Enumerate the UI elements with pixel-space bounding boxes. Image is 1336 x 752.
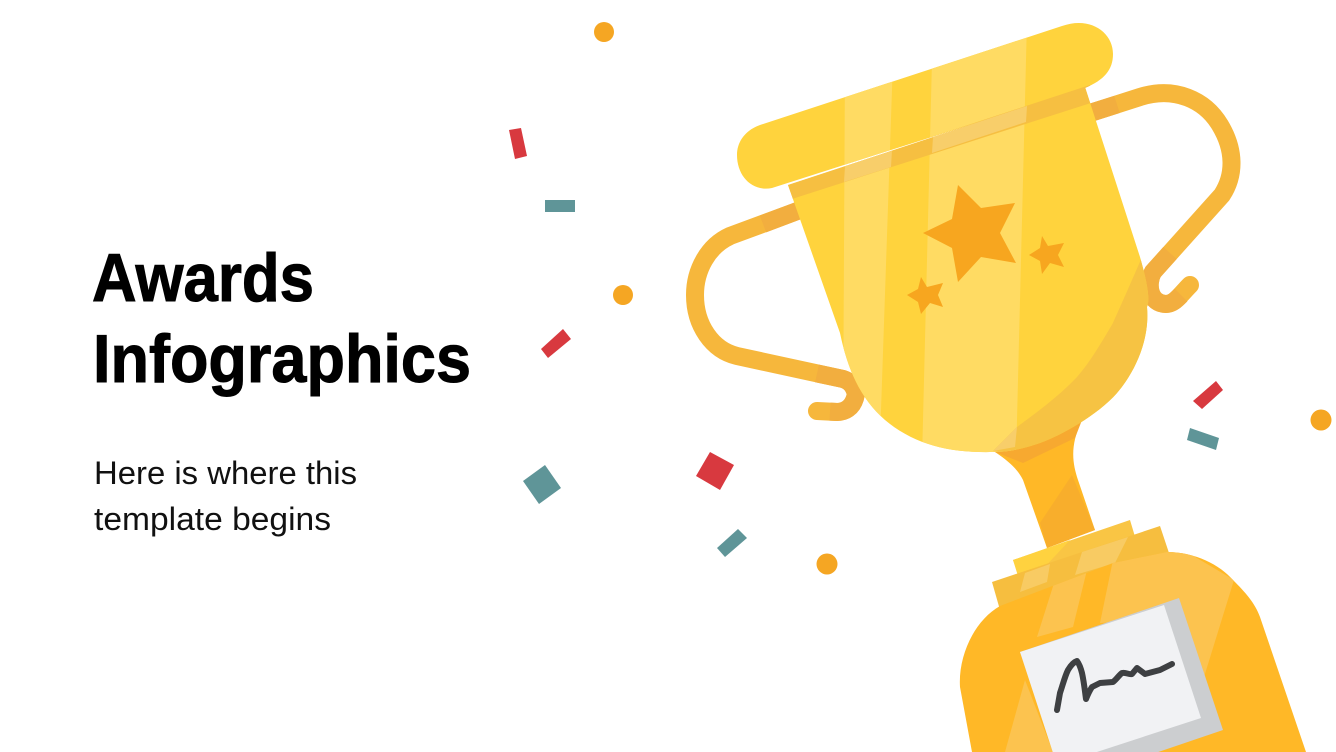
title: Awards [92, 240, 314, 316]
confetti [509, 22, 1332, 574]
base tier lower [992, 526, 1170, 610]
title: Infographics [93, 321, 471, 397]
subtitle text [94, 455, 357, 537]
signature [1057, 661, 1172, 710]
trophy stem [995, 420, 1095, 548]
plaque shadow [1020, 598, 1223, 752]
cup highlights [788, 38, 1148, 452]
trophy [695, 20, 1306, 752]
stars [907, 185, 1064, 314]
subtitle text: template begins [94, 501, 331, 537]
right handle [1090, 93, 1232, 304]
trophy base body [960, 552, 1306, 752]
rim [737, 23, 1113, 189]
subtitle text: Here is where this [94, 455, 357, 491]
stem shadow [1040, 475, 1095, 548]
cup [788, 87, 1148, 452]
stem collar [995, 420, 1082, 463]
left handle [695, 210, 856, 412]
base tier top [1013, 520, 1136, 578]
base highlights [1005, 545, 1234, 752]
title [92, 240, 471, 397]
plaque [1020, 605, 1201, 752]
